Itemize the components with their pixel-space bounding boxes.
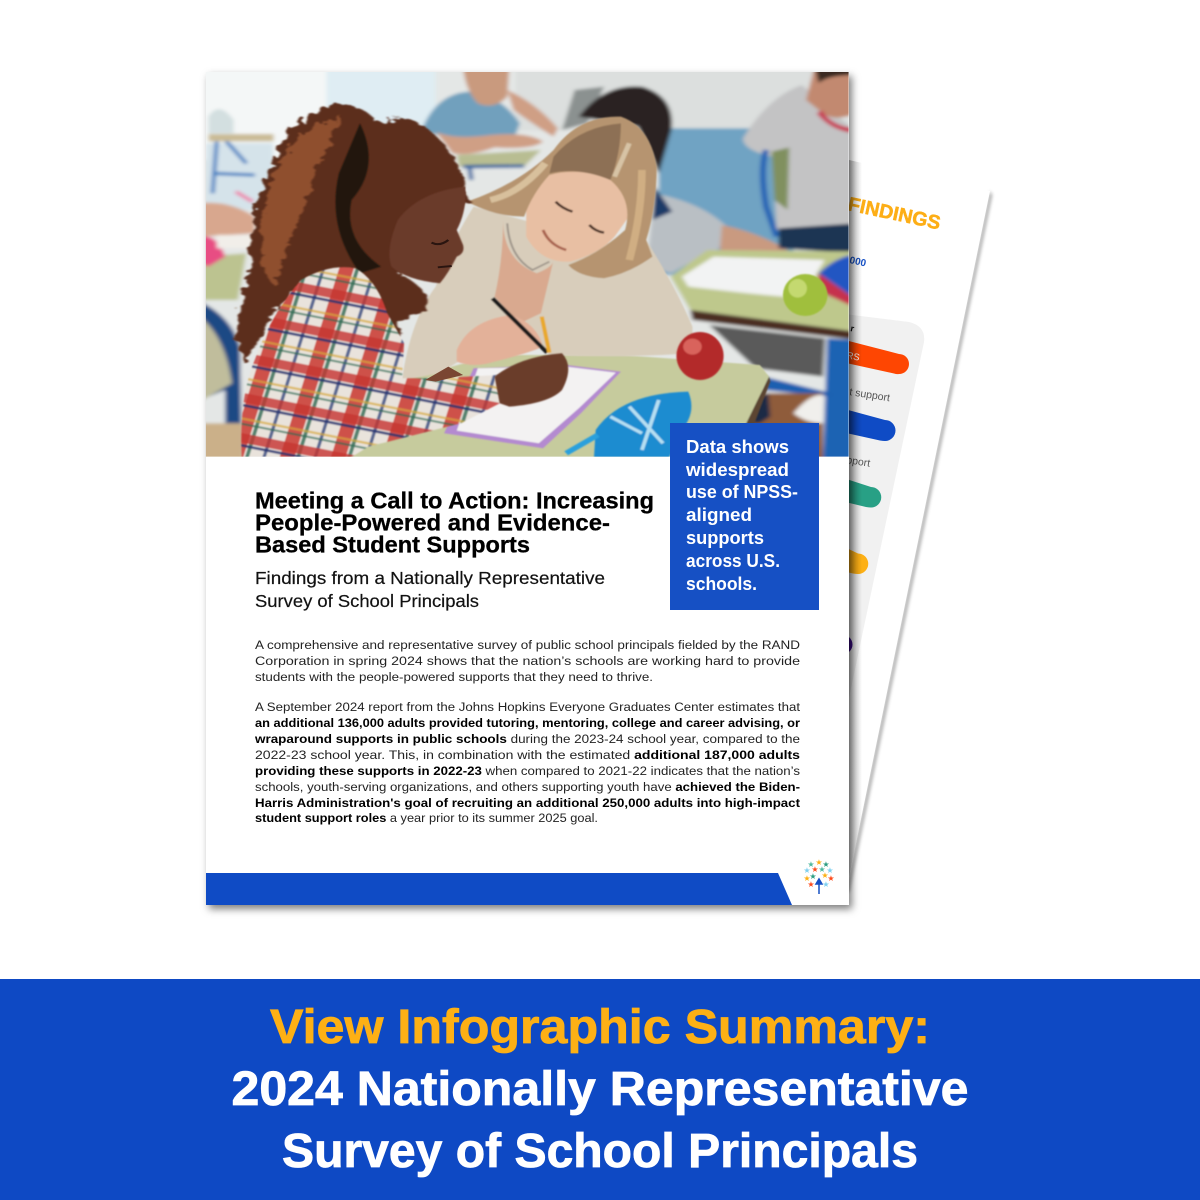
red apple (676, 332, 724, 380)
icon: star burst logo with arrow: ★ (807, 860, 815, 869)
back page grey panel (820, 311, 924, 712)
back page: key findings sheet (820, 153, 992, 892)
icon: star burst logo with arrow: ★ (821, 871, 829, 880)
left desk and pink items (200, 253, 246, 300)
report paragraph: wraparound supports in public schools during the 2023-24 school year, compared to the (254, 732, 800, 746)
document subtitle: Findings from a Nationally Representative (255, 568, 605, 588)
report paragraph: Harris Administration's goal of recruiting an additional 250,000 adults into high-impact (255, 796, 800, 810)
icon: star burst logo with arrow: ★ (807, 880, 815, 889)
callout box: Data shows (686, 437, 789, 457)
callout box (670, 423, 819, 610)
background boy with grey shirt (646, 193, 730, 273)
intro paragraph (255, 638, 800, 684)
document title: People-Powered and Evidence- (255, 510, 610, 536)
report paragraph: an additional 136,000 adults provided tutoring, mentoring, college and career advising, or (255, 716, 800, 730)
foreground desk (322, 355, 770, 465)
document title (255, 488, 654, 558)
callout box: use of NPSS- (686, 482, 798, 502)
face (526, 171, 628, 262)
necklace (507, 223, 549, 270)
banner title: 2024 Nationally Representative (232, 1063, 968, 1116)
intro paragraph: students with the people-powered supports that they need to thrive. (255, 670, 653, 684)
report paragraph (254, 700, 801, 825)
back page figure: 000 (848, 255, 867, 269)
page shade on back sheet (849, 160, 862, 877)
hand with pen (457, 315, 543, 365)
plaid shirt (241, 267, 503, 465)
icon: star burst logo with arrow: ★ (822, 880, 830, 889)
callout box: widespread (685, 460, 789, 480)
blue bar (837, 407, 896, 441)
callout box: across U.S. (686, 551, 780, 571)
banner title: Survey of School Principals (282, 1125, 918, 1178)
label: support: t support (849, 386, 891, 404)
icon: star burst logo with arrow: ★ (803, 874, 811, 883)
student girl (236, 103, 568, 465)
face (389, 187, 466, 283)
purple bar (837, 632, 853, 654)
report paragraph: A September 2024 report from the Johns Hopkins Everyone Graduates Center estimates that (255, 700, 801, 714)
banner (0, 979, 1200, 1200)
back page heading: FINDINGS (846, 193, 942, 234)
photo: teacher helping a student at a classroom desk (200, 67, 857, 465)
forearm and writing hand (495, 353, 568, 407)
banner heading: View Infographic Summary: (270, 1001, 930, 1054)
icon: star burst logo with arrow: ★ (811, 865, 819, 874)
teacher (402, 117, 692, 380)
icon: star burst logo with arrow: ★ (815, 858, 823, 867)
apples and pencil case (566, 274, 828, 465)
document title: Based Student Supports (255, 532, 530, 558)
classroom background (200, 67, 857, 463)
report paragraph: schools, youth-serving organizations, and others supporting youth have achieved the Biden- (255, 780, 800, 794)
document subtitle: Survey of School Principals (255, 591, 479, 611)
icon: star burst logo with arrow: ★ (826, 866, 834, 875)
intro paragraph: A comprehensive and representative survey of public school principals fielded by the RAND (255, 638, 800, 652)
icon: star burst logo with arrow: ★ (803, 866, 811, 875)
report paragraph: student support roles a year prior to its summer 2025 goal. (255, 811, 598, 825)
icon: star burst logo with arrow: ★ (809, 872, 817, 881)
banner title (232, 1063, 968, 1178)
callout box: aligned (686, 505, 752, 525)
footer bar (206, 873, 792, 905)
icon: star burst logo with arrow: ★ (818, 865, 826, 874)
green bar (837, 476, 881, 508)
report paragraph: 2022-23 school year. This, in combination with the estimated additional 187,000 adults (255, 748, 800, 762)
report paragraph: providing these supports in 2022-23 when compared to 2021-22 indicates that the nation’s (255, 764, 800, 778)
chair at left (206, 302, 244, 426)
document subtitle (255, 568, 605, 611)
orange bar (837, 338, 909, 374)
green apple (783, 274, 828, 316)
eyes and smile (556, 202, 604, 233)
page sheet (206, 72, 849, 905)
front page (200, 67, 862, 905)
icon: star burst logo with arrow (803, 858, 835, 894)
blue pencil case (594, 392, 691, 465)
curly hair (236, 103, 469, 363)
background girl at right (743, 85, 857, 230)
notebook (444, 365, 621, 448)
back page panel label: r (850, 323, 856, 334)
orange bar: RS (845, 350, 861, 364)
icon: star burst logo with arrow: ★ (822, 860, 830, 869)
intro paragraph: Corporation in spring 2024 shows that the nation’s schools are working hard to provide (255, 654, 800, 668)
icon: star burst logo with arrow: ★ (827, 874, 835, 883)
cardigan (402, 207, 692, 380)
callout box: schools. (686, 574, 757, 594)
label: support: pport (846, 454, 871, 470)
callout box: supports (686, 528, 764, 548)
background boy in blue shirt (421, 92, 520, 140)
blond hair (467, 117, 657, 278)
chest (495, 220, 554, 323)
document title: Meeting a Call to Action: Increasing (255, 488, 654, 514)
right desk (671, 250, 857, 332)
yellow bar (838, 544, 868, 574)
